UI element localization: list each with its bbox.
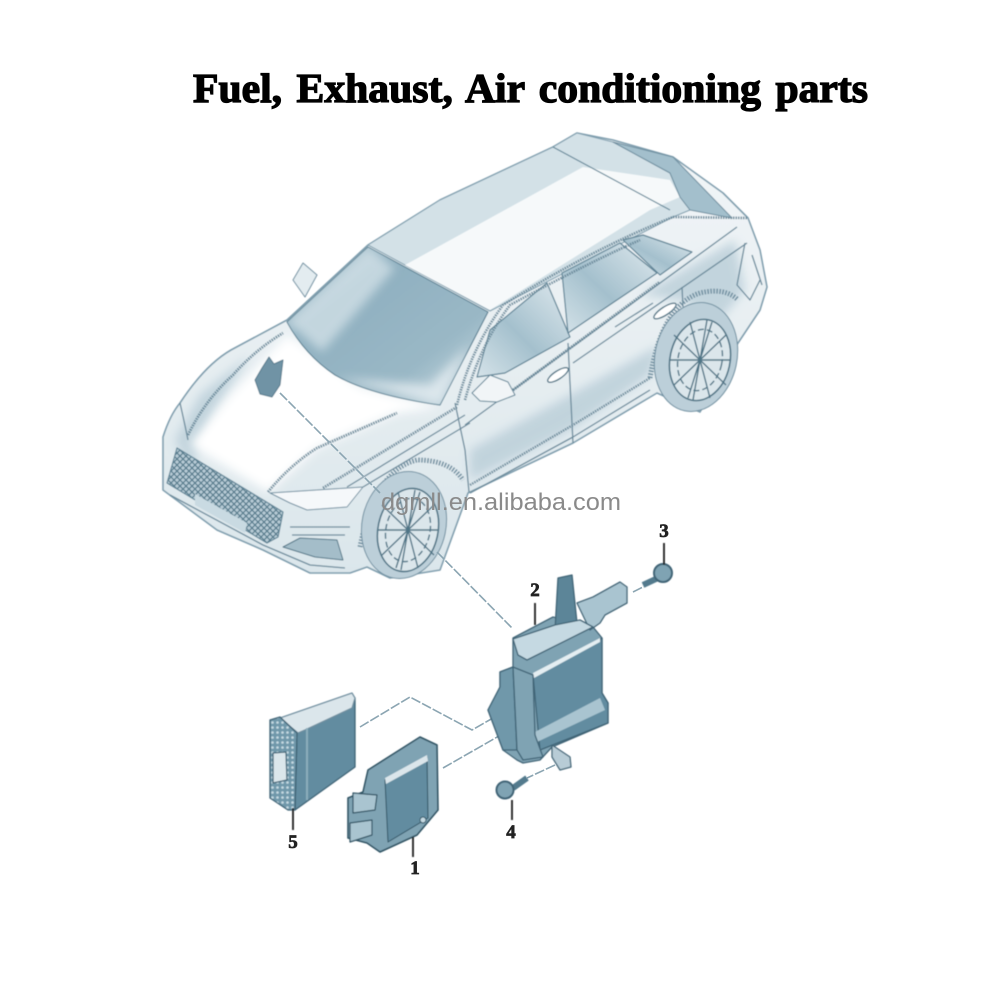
upper tab xyxy=(555,575,577,630)
number 3: 3 xyxy=(659,521,669,542)
hood marker spot xyxy=(255,357,283,397)
number 1: 1 xyxy=(410,858,420,879)
roof xyxy=(368,133,690,311)
number 5: 5 xyxy=(288,832,298,853)
part numbers xyxy=(288,521,669,879)
windshield xyxy=(287,247,488,405)
connector xyxy=(273,752,287,783)
inner rim highlight xyxy=(385,755,428,784)
car illustration xyxy=(163,133,767,587)
plugs xyxy=(350,793,377,842)
side windows xyxy=(477,235,692,377)
left mirror xyxy=(293,263,317,297)
body lines xyxy=(170,217,762,568)
top face xyxy=(513,620,593,660)
title: Fuel, Exhaust, Air conditioning parts xyxy=(193,65,868,111)
right arm xyxy=(577,582,627,630)
housing xyxy=(348,737,438,852)
watermark: dgmll.en.alibaba.com xyxy=(381,489,621,516)
bolt 3 xyxy=(643,564,672,585)
connector dashed lines xyxy=(280,393,643,778)
parts exploded view xyxy=(270,543,672,857)
front wheel arch and wheel xyxy=(352,460,463,587)
screw xyxy=(420,817,426,823)
grille number plate xyxy=(195,494,247,533)
main face xyxy=(533,638,608,750)
foot xyxy=(552,745,571,770)
front face xyxy=(270,717,297,810)
number 4: 4 xyxy=(506,822,516,843)
inner face xyxy=(385,757,428,842)
part 2 bracket xyxy=(488,575,627,770)
car body xyxy=(163,133,767,578)
side panel shading xyxy=(175,240,745,480)
rear window xyxy=(613,142,732,218)
part 5 control unit xyxy=(270,693,355,810)
left flange xyxy=(488,667,517,750)
door handles xyxy=(546,301,678,385)
bolt 4 xyxy=(496,778,527,798)
leader lines xyxy=(293,543,664,857)
top strip xyxy=(280,693,355,733)
part 1 module xyxy=(348,737,438,852)
side face xyxy=(295,698,355,810)
hood highlight xyxy=(190,335,440,492)
rear wheel arch and wheel xyxy=(644,291,748,419)
headlight xyxy=(270,487,363,510)
right mirror xyxy=(472,375,515,402)
lower air intake xyxy=(283,538,343,560)
number 2: 2 xyxy=(530,580,540,601)
centre rib xyxy=(513,667,543,760)
light strips xyxy=(533,638,600,678)
silhouette xyxy=(488,617,608,763)
front grille xyxy=(167,448,283,543)
side detail stripe xyxy=(306,728,308,800)
